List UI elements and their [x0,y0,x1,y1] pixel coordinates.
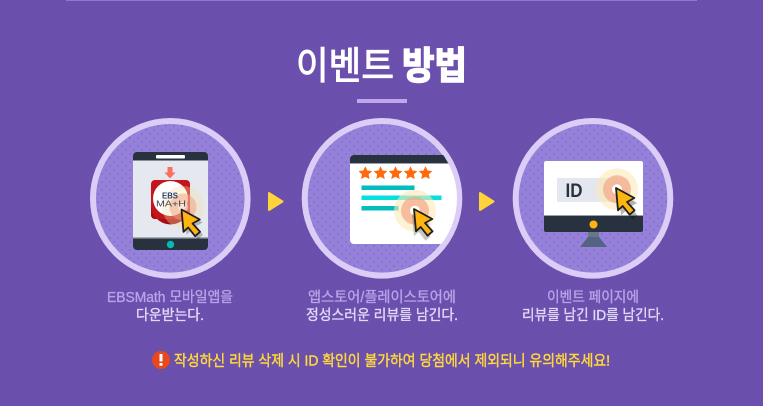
step 1 caption [107,289,233,324]
arrow: step 1 to 2 [269,193,282,210]
step 1 caption: 다운받는다. [136,307,204,324]
icon: review window [350,155,457,244]
callout: warning [152,351,610,370]
ID input field [557,178,628,202]
app logo text: EBS [162,192,179,200]
circle badge [93,121,248,276]
step 2 caption: 정성스러운 리뷰를 남긴다. [306,307,458,324]
step 3 caption [522,289,664,324]
title: 이벤트 [296,46,394,88]
icon: cursor [616,188,638,220]
step 2 caption: 앱스토어/플레이스토어에 [308,289,456,306]
app logo text [156,192,186,208]
icon: cursor [182,210,203,239]
step 2 caption [306,289,458,324]
icon: cursor [412,209,433,241]
title: 방법 [402,46,467,88]
app logo text: MA+H [156,200,186,208]
panel: step 3 monitor [516,121,670,324]
title [296,46,467,88]
icon: tablet [133,152,208,250]
icon: download arrow [164,167,176,178]
panel: step 1 tablet [93,121,248,324]
icon: click ripple [596,168,638,210]
icon: stars [359,167,432,178]
arrow: step 2 to 3 [480,193,494,210]
circle badge [516,121,670,276]
review text lines [362,186,442,210]
panel: step 2 review [305,121,470,324]
step 3 caption: 이벤트 페이지에 [547,289,639,306]
warning text: 작성하신 리뷰 삭제 시 ID 확인이 불가하여 당첨에서 제외되니 유의해주세요! [174,352,610,370]
icon: warning [152,351,170,369]
icon: click ripple [162,186,204,228]
step 3 caption: 리뷰를 남긴 ID를 남긴다. [522,307,664,324]
ID input field: ID [566,181,582,202]
icon: monitor [544,161,643,247]
circle badge [305,121,459,276]
icon: click ripple [394,190,436,232]
icon: EBS Math app [151,180,190,224]
step 1 caption: EBSMath 모바일앱을 [107,289,233,306]
